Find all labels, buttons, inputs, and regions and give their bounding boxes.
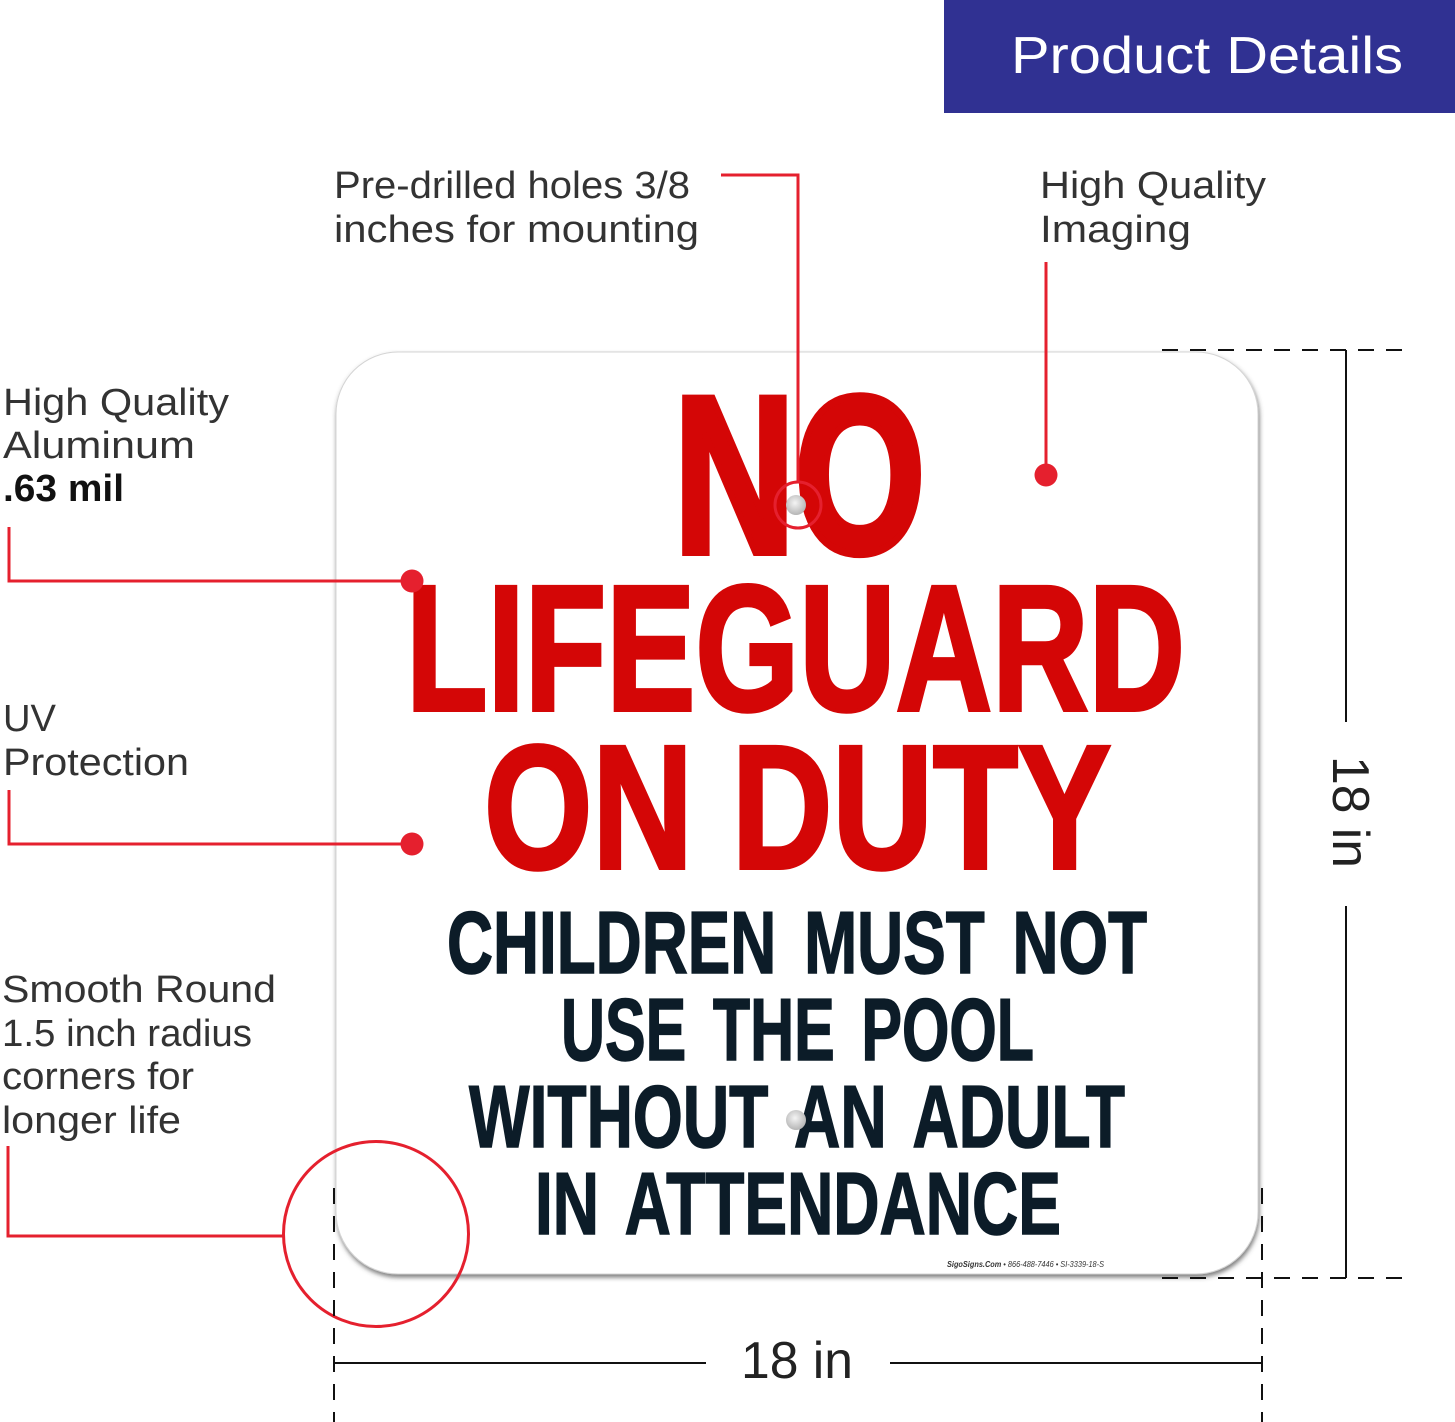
sign heading: LIFEGUARD: LIFEGUARD bbox=[406, 548, 1185, 748]
callout: smooth round corners bbox=[2, 969, 468, 1326]
callout: high quality aluminum: High Quality bbox=[3, 382, 229, 424]
callout: smooth round corners: corners for bbox=[2, 1056, 194, 1098]
callout: high quality aluminum: Aluminum bbox=[3, 425, 195, 467]
callout: high quality imaging bbox=[1034, 165, 1266, 486]
callout: UV protection: Protection bbox=[3, 742, 189, 784]
sign heading: ON DUTY: ON DUTY bbox=[484, 710, 1111, 906]
callout: smooth round corners: longer life bbox=[2, 1100, 181, 1142]
callout: smooth round corners: Smooth Round bbox=[2, 969, 276, 1011]
callout: high quality imaging: High Quality bbox=[1040, 165, 1266, 207]
sign text: children must not use the pool bbox=[447, 893, 1147, 1253]
sign text: children must not use the pool: USE THE POOL bbox=[561, 980, 1034, 1079]
callout: UV protection: UV bbox=[3, 698, 57, 740]
dimension: height 18 in: 18 in bbox=[1321, 756, 1379, 868]
sign text: children must not use the pool: IN ATTENDANCE bbox=[535, 1154, 1061, 1253]
callout: high quality aluminum: .63 mil bbox=[3, 468, 124, 510]
callout: pre-drilled holes bbox=[334, 165, 821, 528]
mounting hole: bottom bbox=[786, 1110, 806, 1130]
callout: pre-drilled holes: Pre-drilled holes 3/8 bbox=[334, 165, 690, 207]
callout: smooth round corners: 1.5 inch radius bbox=[2, 1013, 252, 1055]
callout: high quality imaging: Imaging bbox=[1040, 209, 1191, 251]
sign background bbox=[336, 352, 1258, 1274]
callout: UV protection bbox=[3, 698, 424, 856]
header: Product Details: Product Details bbox=[1011, 27, 1403, 85]
dimension: width 18 in: 18 in bbox=[741, 1332, 853, 1390]
callout: pre-drilled holes: inches for mounting bbox=[334, 209, 699, 251]
sign text: children must not use the pool: WITHOUT AN ADULT bbox=[469, 1067, 1125, 1166]
mounting hole: top bbox=[786, 495, 806, 515]
sign text: children must not use the pool: CHILDREN MUST NOT bbox=[447, 893, 1147, 992]
sign heading: NO: NO bbox=[674, 351, 925, 600]
panel: aluminum sign bbox=[336, 351, 1258, 1274]
header: Product Details bbox=[944, 0, 1455, 113]
sign fine print: SigoSigns.Com • 866-488-7446 • SI-3339-18-S bbox=[947, 1260, 1105, 1269]
callout: high quality aluminum bbox=[3, 382, 424, 592]
